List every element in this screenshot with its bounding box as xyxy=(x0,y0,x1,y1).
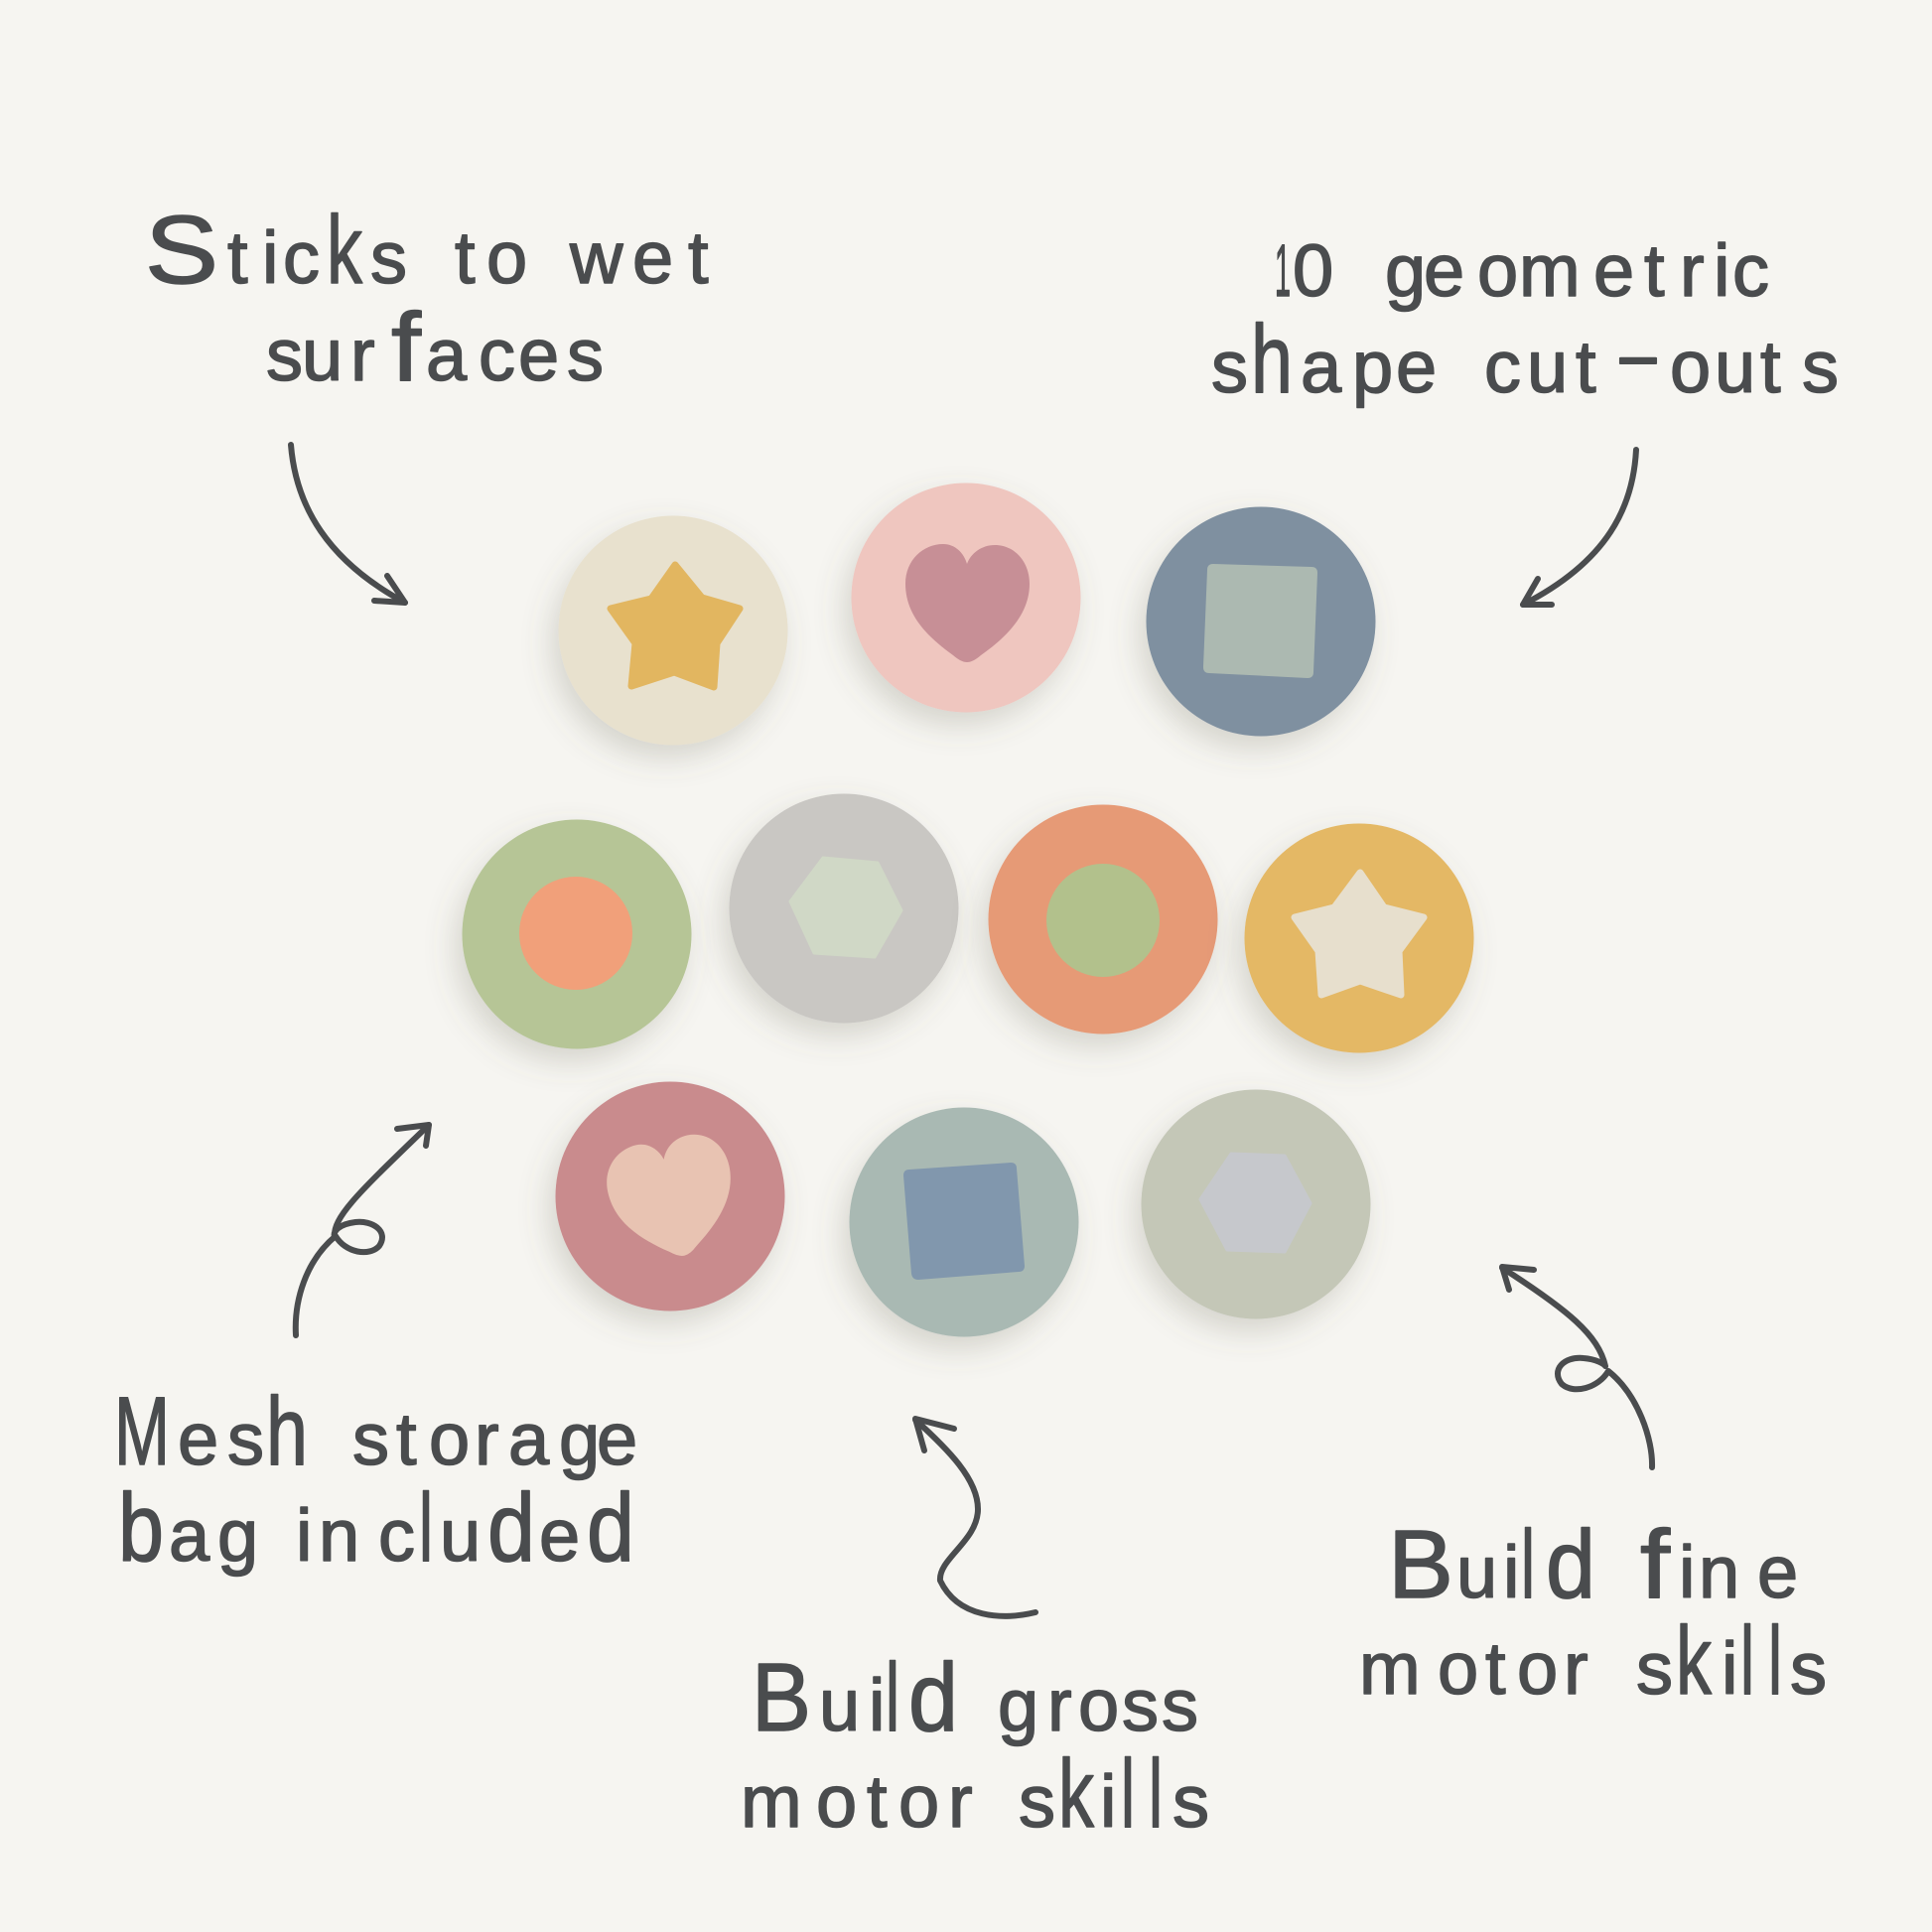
disc xyxy=(1142,1090,1370,1318)
star cut-out xyxy=(611,565,740,687)
label line: motor skills: i xyxy=(1100,1760,1116,1843)
disc xyxy=(850,1108,1078,1336)
square cut-out xyxy=(903,1163,1025,1280)
token: sea-blue disc with blue square xyxy=(850,1108,1078,1336)
label line: Sticks to wet: tic xyxy=(227,216,320,299)
label line: Build fine: B xyxy=(1388,1510,1453,1618)
hexagon cut-out xyxy=(790,858,901,957)
disc xyxy=(556,1082,784,1311)
label line: bag included: e xyxy=(539,1494,580,1577)
label line: Build fine: ine xyxy=(1679,1531,1798,1613)
label line: Build gross: ui xyxy=(819,1664,885,1746)
square cut-out xyxy=(1203,564,1317,678)
label line: Sticks to wet: S xyxy=(145,196,218,304)
disc xyxy=(989,804,1217,1035)
token: rose disc with peach heart xyxy=(556,1082,784,1311)
token: grey disc with pale hexagon xyxy=(729,794,959,1023)
arrow: from geometric label to tokens xyxy=(1523,450,1636,605)
token: yellow disc with cream star xyxy=(1245,824,1473,1052)
label line: motor skills: l xyxy=(1121,1739,1135,1848)
token: slate disc with pale square xyxy=(1146,506,1376,737)
token: cream disc with yellow star xyxy=(558,516,788,745)
arrow: from gross motor label to tokens, S-curve xyxy=(915,1419,1035,1616)
token: coral disc with green circle xyxy=(989,804,1217,1035)
token: pink disc with rose heart xyxy=(852,483,1080,713)
label line: Mesh storage: h xyxy=(266,1377,308,1485)
label line: Build gross: B xyxy=(752,1643,811,1751)
circle cut-out xyxy=(519,877,632,990)
label line: motor skills: k xyxy=(1676,1606,1712,1715)
label line: motor skills: l xyxy=(1740,1606,1754,1715)
label line: Build fine: f xyxy=(1640,1510,1671,1618)
label line: Sticks to wet: k xyxy=(327,196,362,304)
label line: motor skills: l xyxy=(1768,1606,1782,1715)
arrow: from Sticks label to tokens xyxy=(291,445,405,603)
star cut-out xyxy=(1295,873,1424,995)
label line: shape cut-outs: h xyxy=(1251,305,1293,413)
label line: bag included: u xyxy=(440,1494,481,1577)
hexagon cut-out xyxy=(1200,1154,1311,1252)
token: sage disc with grey hexagon xyxy=(1142,1090,1370,1318)
callout: 10 geometric shape cut-outs xyxy=(1211,229,1839,413)
label line: motor skills: k xyxy=(1058,1739,1094,1848)
disc xyxy=(852,483,1080,713)
callout: Mesh storage bag included xyxy=(114,1377,637,1582)
label line: shape cut-outs: ape cut xyxy=(1301,326,1596,408)
callout: Build fine motor skills xyxy=(1359,1510,1827,1715)
label line: Mesh storage: es xyxy=(178,1398,264,1480)
disc xyxy=(729,794,959,1023)
heart cut-out xyxy=(905,544,1030,662)
label line: Mesh storage: storage xyxy=(318,1398,637,1480)
label line: Build fine: l xyxy=(1521,1510,1535,1618)
label line: Build fine: ui xyxy=(1456,1531,1519,1613)
label line: Mesh storage: M xyxy=(114,1377,170,1485)
label line: Build gross: d xyxy=(908,1643,958,1751)
label line: shape cut-outs: - xyxy=(1614,314,1662,396)
label line: shape cut-outs: outs xyxy=(1670,326,1839,408)
disc xyxy=(1146,506,1376,737)
label line: surfaces: sur xyxy=(266,314,375,396)
arrow: from fine motor label to tokens, with loop xyxy=(1502,1267,1652,1467)
label line: Sticks to wet: s to wet xyxy=(370,216,709,299)
label line: 10 geometric: 1 xyxy=(1275,229,1291,312)
label line: motor skills: l xyxy=(1149,1739,1163,1848)
label line: motor skills: motor s xyxy=(1359,1627,1673,1710)
label line: bag included: d xyxy=(587,1473,634,1582)
label line: motor skills: s xyxy=(1790,1627,1827,1710)
arrow: from Mesh label to tokens, with loop xyxy=(296,1125,429,1335)
token: green disc with coral circle xyxy=(463,820,691,1048)
label line: Build gross: l xyxy=(886,1643,899,1751)
label line: motor skills: s xyxy=(1173,1760,1209,1843)
label line: bag included: b xyxy=(118,1473,164,1582)
label line: bag included: d xyxy=(487,1473,535,1582)
disc xyxy=(463,820,691,1048)
label line: Build fine: d xyxy=(1546,1510,1595,1618)
label line: shape cut-outs: s xyxy=(1211,326,1248,408)
label line: bag included: ag inc xyxy=(169,1494,415,1577)
disc xyxy=(1245,824,1473,1052)
label line: bag included: l xyxy=(419,1473,433,1582)
label line: 10 geometric: 0 geometric xyxy=(1293,229,1769,312)
disc xyxy=(558,516,788,745)
label line: Build gross: gross xyxy=(973,1664,1198,1746)
label line: motor skills: i xyxy=(1722,1627,1737,1710)
label line: surfaces: f xyxy=(391,293,422,401)
heart cut-out xyxy=(600,1127,746,1269)
callout: Build gross motor skills xyxy=(741,1643,1209,1848)
label line: surfaces: aces xyxy=(426,314,604,396)
callout: Sticks to wet surfaces xyxy=(145,196,709,401)
circle cut-out xyxy=(1046,864,1160,977)
label line: motor skills: motor s xyxy=(741,1760,1055,1843)
